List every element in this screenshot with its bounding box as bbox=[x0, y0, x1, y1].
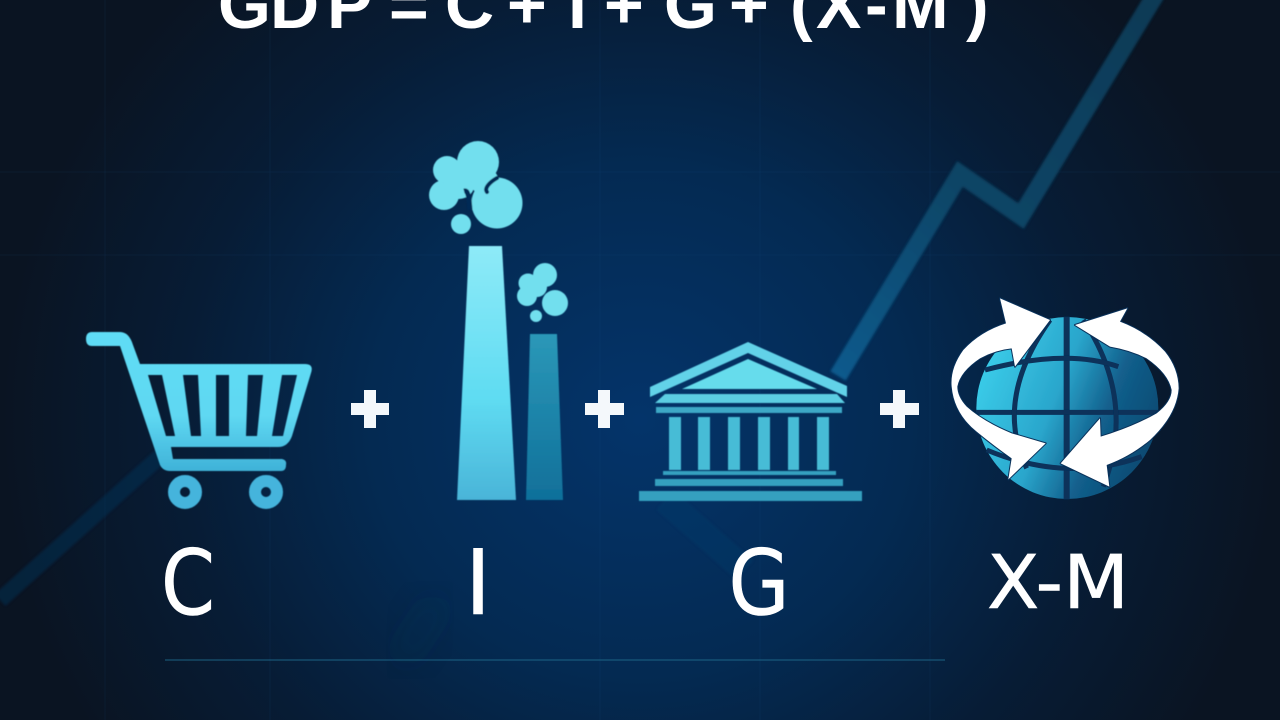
columns bbox=[669, 417, 829, 470]
label C: C bbox=[161, 531, 215, 636]
arrows bbox=[951, 298, 1179, 487]
icon: government building bbox=[639, 342, 862, 501]
arrow loop right bbox=[1061, 308, 1179, 487]
icon: cart wheel left bbox=[174, 481, 196, 503]
label I: I bbox=[465, 531, 491, 636]
small smoke cloud bbox=[517, 263, 568, 322]
large chimney bbox=[457, 246, 516, 500]
steps bbox=[639, 471, 862, 501]
icon: cart wheel right bbox=[255, 481, 277, 503]
icon: shopping cart bbox=[86, 332, 312, 503]
label G: G bbox=[728, 531, 790, 636]
icon: factory chimneys bbox=[429, 141, 568, 500]
plus sign 2 bbox=[585, 390, 624, 428]
roof bbox=[650, 342, 847, 413]
icon: globe with trade arrows bbox=[951, 298, 1179, 499]
large smoke cloud bbox=[429, 141, 522, 234]
plus sign 3 bbox=[880, 390, 919, 428]
small chimney bbox=[526, 334, 563, 500]
plus sign 1 bbox=[351, 390, 389, 428]
arrow loop left bbox=[951, 298, 1050, 479]
globe bbox=[976, 317, 1159, 499]
label X-M: X-M bbox=[987, 540, 1129, 626]
